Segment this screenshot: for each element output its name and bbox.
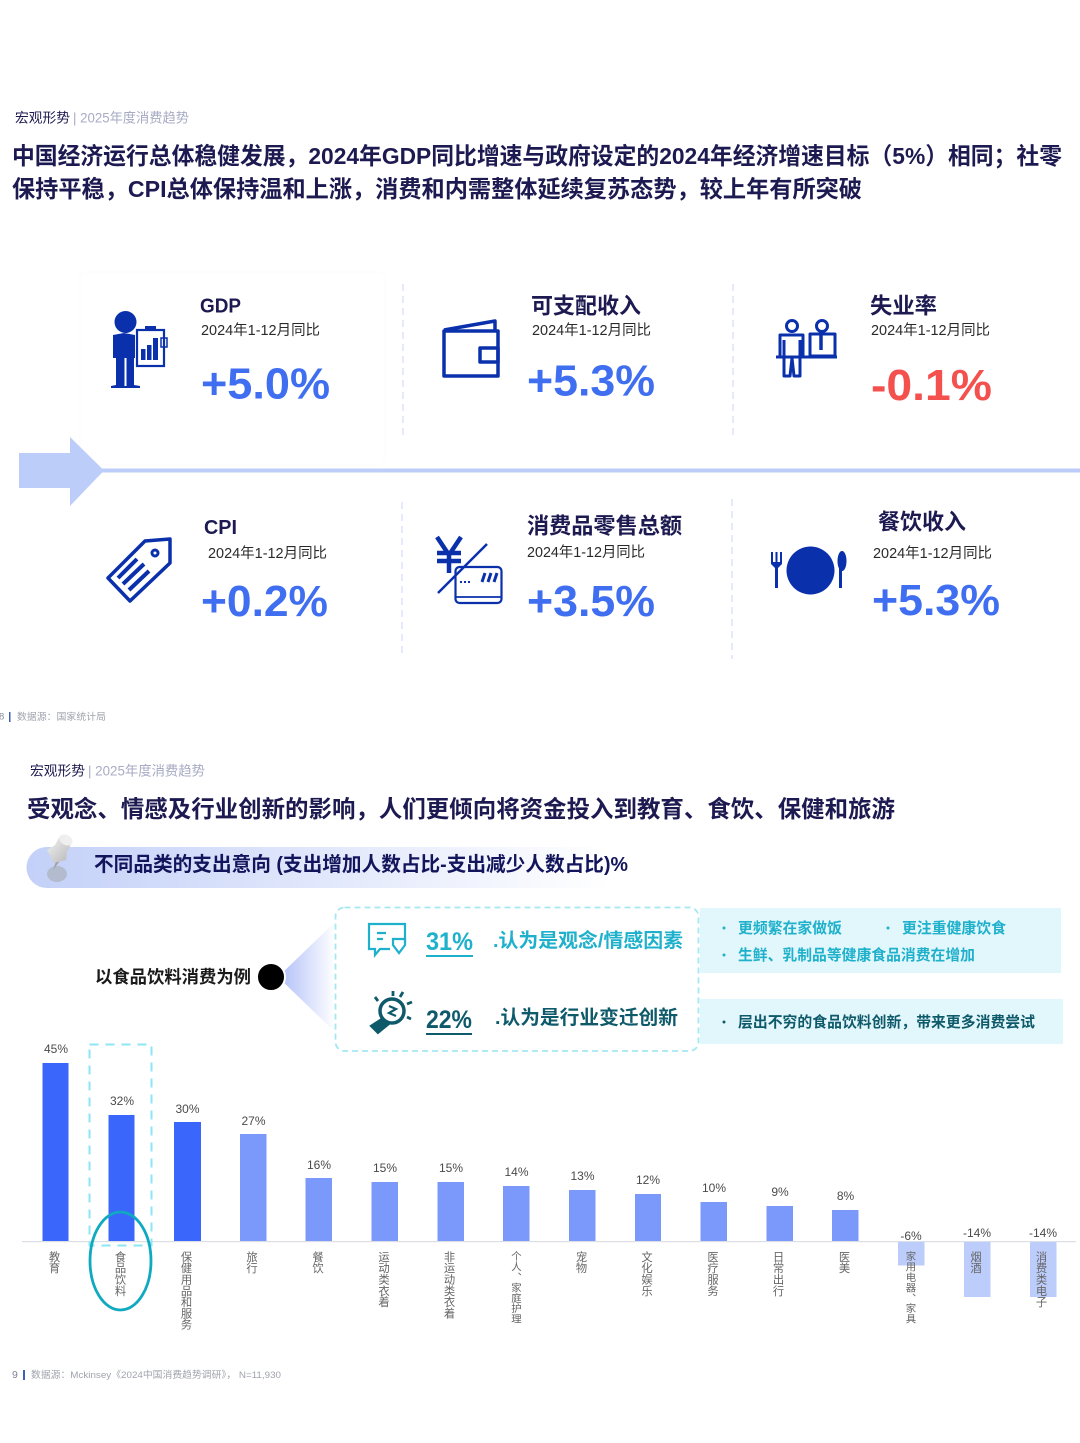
value labels: 9% xyxy=(771,1185,789,1199)
category labels: 保健用品和服务 xyxy=(180,1250,192,1330)
title: page 9 headline: 受观念、情感及行业创新的影响，人们更倾向将资金投入到教育、食饮、保健和旅游 xyxy=(27,795,895,822)
value labels: 10% xyxy=(702,1181,726,1195)
panel: unemployment metric: 2024年1-12月同比 xyxy=(871,322,990,339)
panel: GDP metric xyxy=(80,272,385,465)
panel: retail sales metric: +3.5% xyxy=(527,577,655,626)
value labels: 12% xyxy=(636,1173,660,1187)
category labels: 医疗服务 xyxy=(706,1251,719,1296)
icon: speech bubble with shield xyxy=(369,924,405,955)
value labels: 8% xyxy=(837,1189,855,1203)
value labels: 45% xyxy=(44,1042,68,1056)
panel: catering revenue metric: 餐饮收入 xyxy=(878,510,966,534)
section header: page 9 breadcrumb: 宏观形势 xyxy=(30,764,85,778)
panel: emotional factors detail: 生鲜、乳制品等健康食品消费在增加 xyxy=(738,946,975,964)
category labels: 文化娱乐 xyxy=(640,1250,653,1296)
category labels: 旅行 xyxy=(245,1250,258,1274)
panel: CPI metric: CPI xyxy=(204,517,237,539)
value labels: 15% xyxy=(373,1161,397,1175)
panel: GDP metric: 2024年1-12月同比 xyxy=(201,322,320,339)
section header: page 8 breadcrumb xyxy=(15,110,189,126)
icon: plate with fork and spoon xyxy=(771,546,846,594)
category labels: 日常出行 xyxy=(772,1251,784,1297)
category labels: 教育 xyxy=(48,1251,60,1274)
panel: catering revenue metric: 2024年1-12月同比 xyxy=(873,545,992,562)
stat: 31 percent: 31% xyxy=(426,928,473,956)
panel: industry innovation detail xyxy=(700,999,1063,1044)
panel: GDP metric: +5.0% xyxy=(201,360,330,408)
title: page 8 headline: 保持平稳，CPI总体保持温和上涨，消费和内需整体延续复苏态势，较上年有所突破 xyxy=(12,176,862,202)
panel: industry innovation detail: 层出不穷的食品饮料创新，带来更多消费尝试 xyxy=(738,1013,1035,1031)
category labels xyxy=(48,1250,1047,1330)
panel: retail sales metric: 2024年1-12月同比 xyxy=(527,544,645,561)
value labels: -6% xyxy=(900,1229,922,1243)
value labels xyxy=(44,1042,1057,1243)
panel: retail sales metric xyxy=(437,514,682,626)
callout label: 以食品饮料消费为例 xyxy=(95,967,251,987)
section header: page 9 breadcrumb: | 2025年度消费趋势 xyxy=(88,764,205,778)
panel: GDP metric: GDP xyxy=(200,296,241,318)
section header: page 8 breadcrumb: | 2025年度消费趋势 xyxy=(73,110,189,126)
value labels: 27% xyxy=(241,1114,266,1128)
category labels: 家用电器、家具 xyxy=(904,1250,916,1325)
footer: page 8 source: 数据源：国家统计局 xyxy=(17,711,106,723)
title: page 8 headline: 中国经济运行总体稳健发展，2024年GDP同比增速与政府设定的2024年经济增速目标（5%）相同；社零 xyxy=(12,143,1062,169)
value labels: -14% xyxy=(1029,1226,1057,1240)
panel: disposable income metric xyxy=(444,294,655,406)
panel: emotional factors detail xyxy=(700,908,1061,973)
panel: disposable income metric: 可支配收入 xyxy=(531,294,641,318)
footer: page 9 source: 数据源：Mckinsey《2024中国消费趋势调研》， N=11,930 xyxy=(31,1369,281,1381)
panel: CPI metric xyxy=(108,517,328,626)
panel: CPI metric: 2024年1-12月同比 xyxy=(208,545,327,562)
value labels: 15% xyxy=(439,1161,463,1175)
chart heading banner: 不同品类的支出意向 (支出增加人数占比-支出减少人数占比)% xyxy=(94,852,628,876)
category labels: 宠物 xyxy=(574,1250,587,1274)
icon: person with chart clipboard xyxy=(111,311,167,388)
panel: emotional factors detail: 更注重健康饮食 xyxy=(902,919,1006,937)
value labels: 13% xyxy=(570,1169,595,1183)
category labels: 餐饮 xyxy=(311,1250,324,1274)
section header: page 9 breadcrumb xyxy=(30,764,205,778)
icon: price tag xyxy=(108,539,170,601)
category labels: 非运动类衣着 xyxy=(442,1251,455,1319)
arrow: timeline divider xyxy=(19,437,1080,506)
section header: page 8 breadcrumb: 宏观形势 xyxy=(15,110,70,126)
category labels: 运动类衣着 xyxy=(377,1251,390,1308)
panel: CPI metric: +0.2% xyxy=(201,577,328,626)
highlight: circle around food and beverage label xyxy=(90,1212,151,1310)
bars xyxy=(42,1063,1056,1297)
icon: push pin xyxy=(47,832,75,882)
panel: food and beverage example callout: .认为是观念/情感因素 xyxy=(493,929,683,952)
panel: food and beverage example callout: .认为是行业变迁创新 xyxy=(495,1006,678,1029)
category labels: 医美 xyxy=(838,1251,850,1274)
title: page 8 headline xyxy=(12,143,1062,202)
value labels: -14% xyxy=(963,1226,991,1240)
panel: emotional factors detail: 更频繁在家做饭 xyxy=(738,919,842,937)
panel: disposable income metric: 2024年1-12月同比 xyxy=(532,322,651,339)
bar chart: spending intention by category xyxy=(22,1042,1076,1330)
icon: light bulb xyxy=(372,991,412,1032)
highlight: dashed box around food and beverage xyxy=(90,1044,152,1246)
panel: retail sales metric: 消费品零售总额 xyxy=(527,514,682,538)
value labels: 32% xyxy=(110,1094,134,1108)
panel: disposable income metric: +5.3% xyxy=(527,356,655,406)
panel: unemployment metric xyxy=(776,294,992,410)
category labels: 烟酒 xyxy=(969,1250,982,1274)
icon: two figures at a desk xyxy=(776,320,837,376)
value labels: 14% xyxy=(504,1165,529,1179)
value labels: 16% xyxy=(307,1158,331,1172)
callout marker dot xyxy=(257,963,285,991)
category labels: 食品饮料 xyxy=(114,1250,126,1297)
icon: wallet xyxy=(444,321,498,376)
panel: catering revenue metric: +5.3% xyxy=(872,576,1000,625)
category labels: 个人、家庭护理 xyxy=(509,1251,521,1324)
footer: page 9 source: 9 xyxy=(12,1369,18,1381)
panel: food and beverage example callout xyxy=(95,908,698,1051)
icon: yuan and bank card xyxy=(437,537,502,603)
chart heading banner xyxy=(26,832,628,888)
panel: catering revenue metric xyxy=(771,510,1000,625)
value labels: 30% xyxy=(175,1102,200,1116)
panel: unemployment metric: -0.1% xyxy=(871,361,992,410)
stat: 22 percent: 22% xyxy=(426,1006,472,1034)
panel: unemployment metric: 失业率 xyxy=(870,294,937,318)
category labels: 消费类电子 xyxy=(1034,1250,1047,1308)
